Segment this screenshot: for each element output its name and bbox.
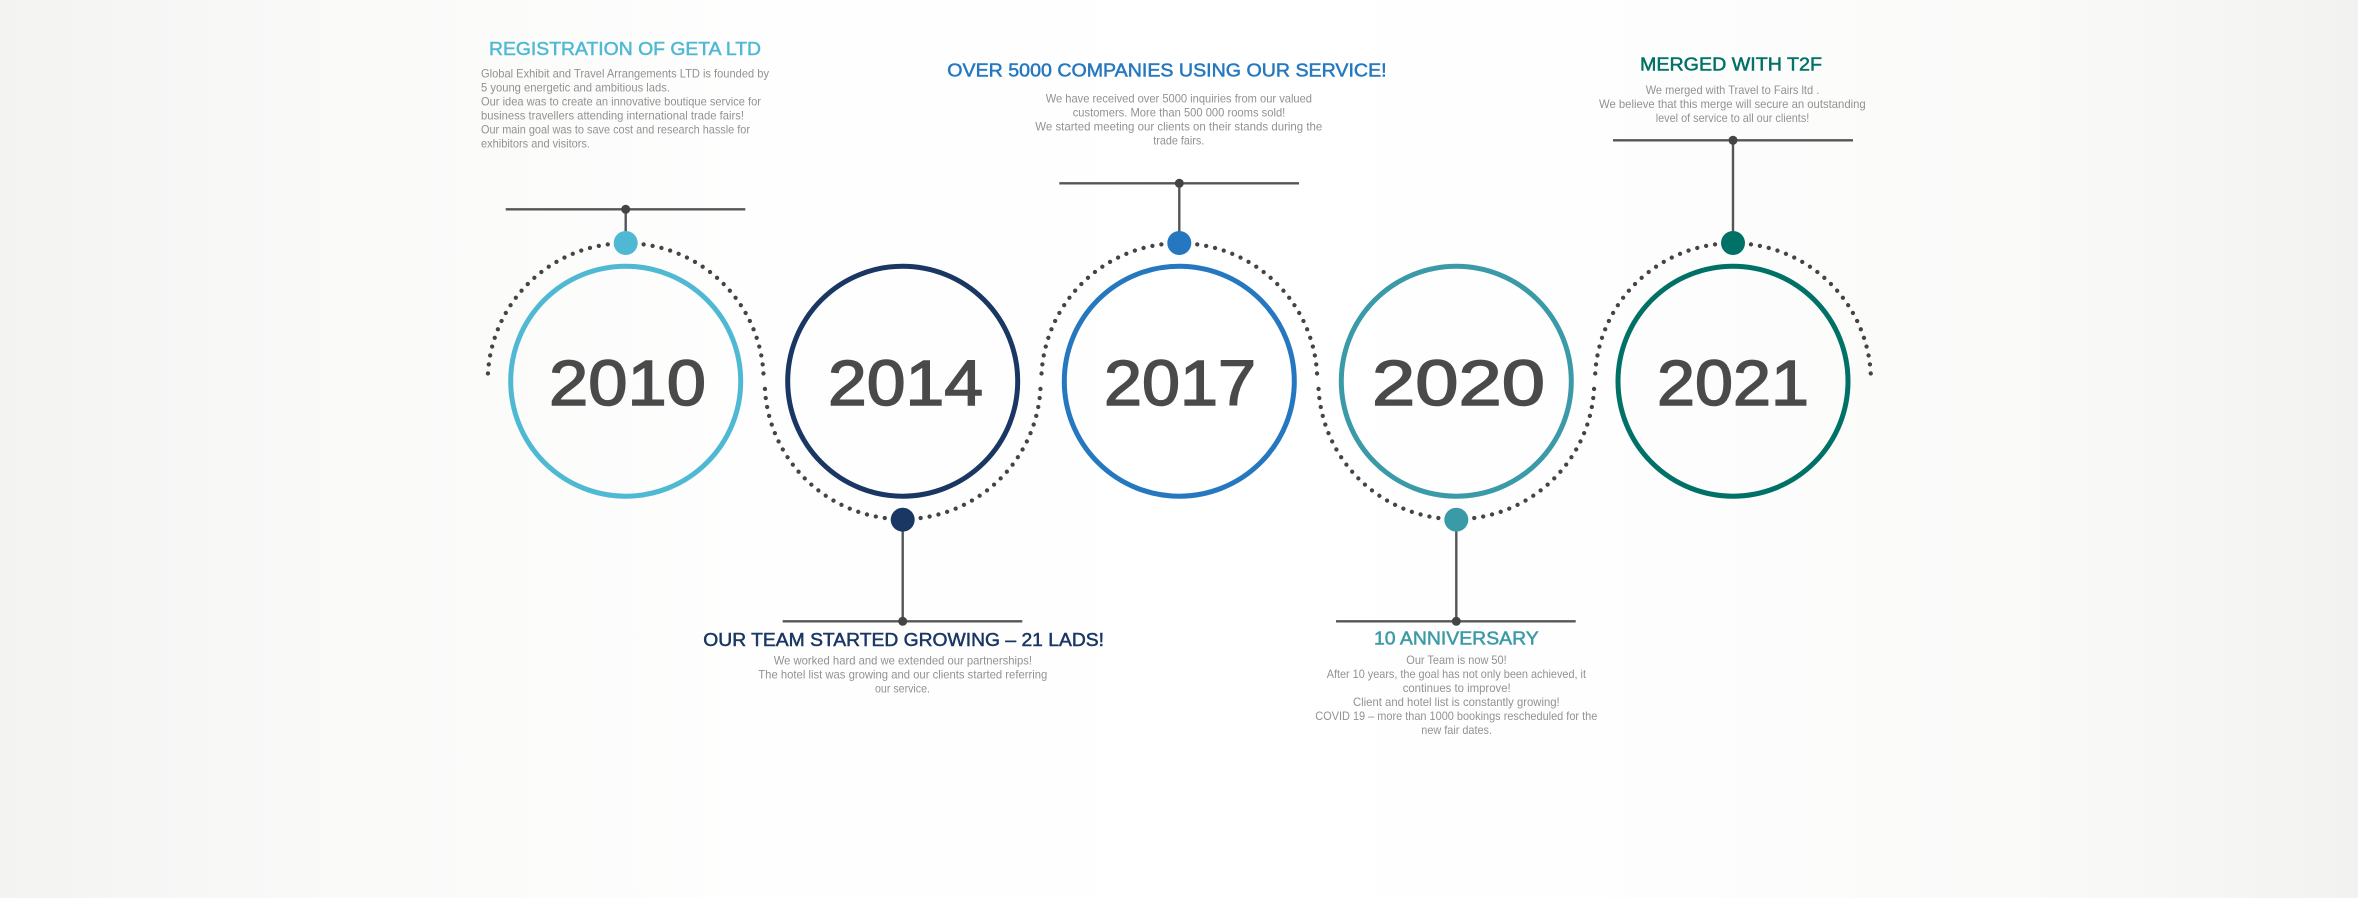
text block: merged: We merged with Travel to Fairs ltd . bbox=[1646, 83, 1819, 97]
text block: 5000 companies: trade fairs. bbox=[1153, 133, 1204, 147]
ring 2014 bbox=[788, 266, 1018, 496]
year 2010: 2010 bbox=[549, 347, 706, 419]
node 2010 bbox=[614, 231, 638, 255]
text block: merged bbox=[1599, 83, 1866, 125]
text block: merged: We believe that this merge will secure an outstanding bbox=[1599, 97, 1866, 111]
text block: registration: Global Exhibit and Travel Arrangements LTD is founded by bbox=[481, 66, 769, 80]
milestone 2014 bbox=[703, 266, 1104, 695]
year 2014: 2014 bbox=[828, 347, 983, 419]
text block: anniversary: new fair dates. bbox=[1421, 723, 1492, 737]
text block: anniversary: continues to improve! bbox=[1403, 681, 1511, 695]
text block: anniversary bbox=[1315, 653, 1598, 737]
text block: merged: level of service to all our clients! bbox=[1656, 111, 1809, 125]
milestone 2010 bbox=[481, 38, 769, 496]
node 2021 bbox=[1721, 231, 1745, 255]
text block: anniversary: Our Team is now 50! bbox=[1406, 653, 1507, 667]
text block: registration: exhibitors and visitors. bbox=[481, 136, 590, 150]
heading: merged: MERGED WITH T2F bbox=[1640, 54, 1822, 75]
text block: registration bbox=[481, 66, 769, 150]
text block: anniversary: COVID 19 – more than 1000 bookings rescheduled for the bbox=[1315, 709, 1598, 723]
milestone 2020 bbox=[1315, 266, 1598, 737]
node 2017 bbox=[1167, 231, 1191, 255]
connector 2010 bbox=[506, 205, 745, 243]
connector 2014 bbox=[783, 520, 1022, 626]
ring 2017 bbox=[1064, 266, 1294, 496]
heading: anniversary: 10 ANNIVERSARY bbox=[1374, 628, 1539, 649]
text block: team growing: our service. bbox=[875, 681, 930, 695]
text block: registration: Our idea was to create an innovative boutique service for bbox=[481, 94, 761, 108]
text block: anniversary: Client and hotel list is constantly growing! bbox=[1353, 695, 1560, 709]
connector 2021 bbox=[1613, 136, 1853, 243]
text block: 5000 companies bbox=[1035, 91, 1323, 147]
ring 2010 bbox=[511, 266, 741, 496]
connector 2017 bbox=[1059, 179, 1299, 243]
text block: anniversary: After 10 years, the goal has not only been achieved, it bbox=[1327, 667, 1587, 681]
text block: 5000 companies: We started meeting our clients on their stands during the bbox=[1035, 119, 1323, 133]
heading: registration: REGISTRATION OF GETA LTD bbox=[489, 38, 761, 59]
text block: 5000 companies: customers. More than 500 000 rooms sold! bbox=[1073, 105, 1285, 119]
text block: registration: business travellers attending international trade fairs! bbox=[481, 108, 744, 122]
text block: team growing: We worked hard and we extended our partnerships! bbox=[774, 653, 1032, 667]
ring 2021 bbox=[1618, 266, 1848, 496]
ring 2020 bbox=[1341, 266, 1571, 496]
text block: registration: Our main goal was to save cost and research hassle for bbox=[481, 122, 750, 136]
text block: 5000 companies: We have received over 5000 inquiries from our valued bbox=[1046, 91, 1312, 105]
dotted wave path bbox=[488, 244, 1871, 518]
milestone 2021 bbox=[1599, 54, 1866, 496]
year 2021: 2021 bbox=[1657, 347, 1809, 419]
text block: registration: 5 young energetic and ambitious lads. bbox=[481, 80, 670, 94]
heading: team growing: OUR TEAM STARTED GROWING – 21 LADS! bbox=[703, 629, 1104, 650]
node 2014 bbox=[891, 508, 915, 532]
heading: 5000 companies: OVER 5000 COMPANIES USING OUR SERVICE! bbox=[947, 60, 1387, 81]
text block: team growing bbox=[758, 653, 1047, 695]
node 2020 bbox=[1444, 508, 1468, 532]
text block: team growing: The hotel list was growing and our clients started referring bbox=[758, 667, 1047, 681]
connector 2020 bbox=[1336, 520, 1576, 626]
milestone 2017 bbox=[947, 60, 1387, 496]
year 2020: 2020 bbox=[1372, 347, 1545, 419]
year 2017: 2017 bbox=[1104, 347, 1256, 419]
